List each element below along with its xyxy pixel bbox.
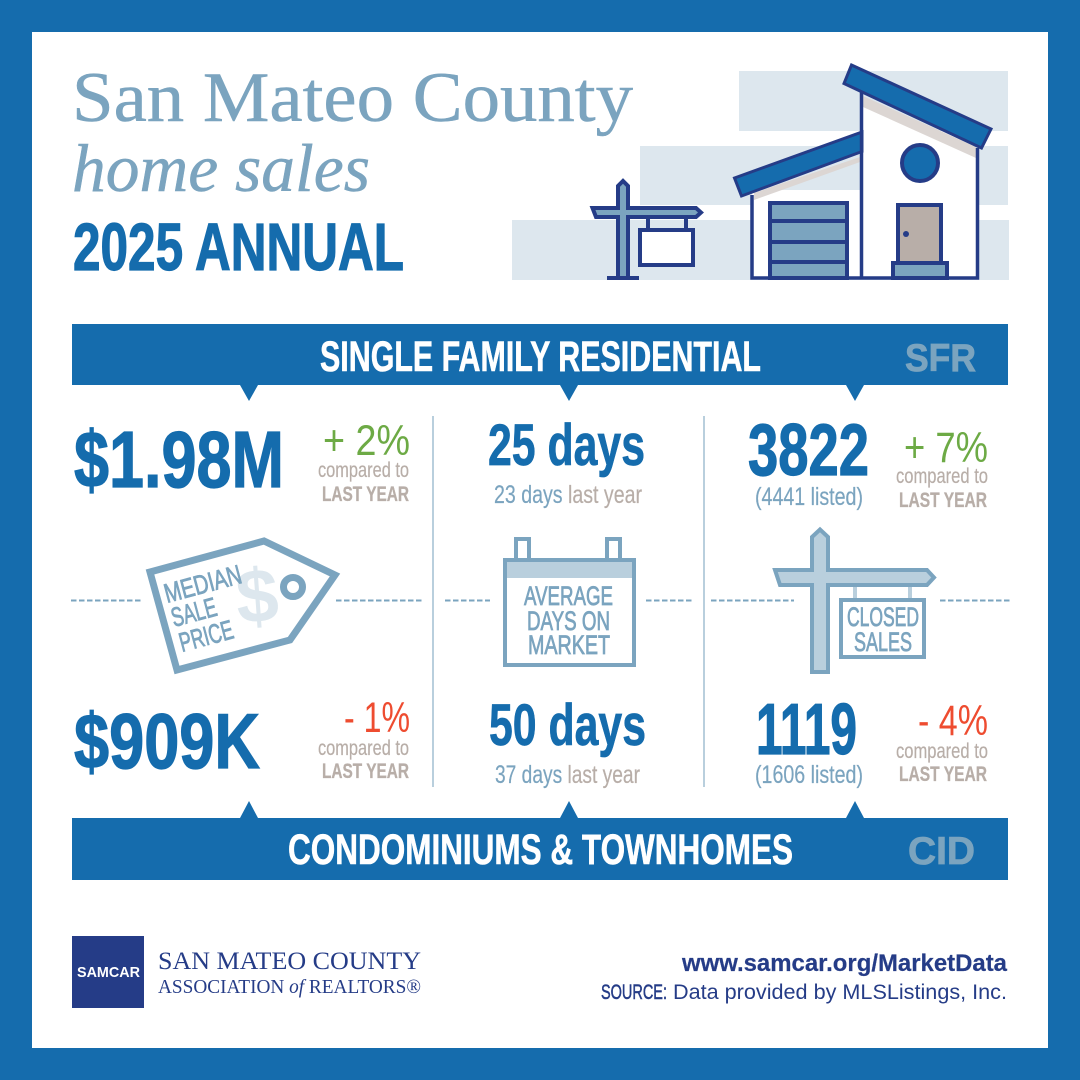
CID closed sales stat: compared to: [896, 740, 988, 763]
icon: calendar, average days on market: MARKET: [528, 630, 610, 660]
SFR days on market stat: [488, 413, 645, 509]
CID days on market stat: [489, 693, 646, 789]
SFR median sale price stat: + 2%: [323, 417, 410, 465]
icon: price tag, median sale price: MEDIAN: [161, 559, 245, 609]
logo: SAMCAR: SAN MATEO COUNTY: [158, 948, 421, 975]
icon: calendar, average days on market: AVERAGE: [524, 581, 613, 611]
icon: house: [734, 65, 991, 278]
title line: home sales: home sales: [72, 130, 370, 206]
CID closed sales stat: 1119: [756, 690, 857, 770]
background bars: [512, 71, 1009, 280]
CID days on market stat: 50 days: [489, 693, 646, 758]
banner: condominiums and townhomes: CID: [908, 830, 975, 873]
logo: SAMCAR: ASSOCIATION of REALTORS®: [158, 976, 421, 998]
SFR closed sales stat: [748, 410, 988, 512]
CID median sale price stat: LAST YEAR: [322, 760, 409, 783]
source and website: [601, 950, 1008, 1004]
SFR closed sales stat: 3822: [748, 410, 869, 491]
CID closed sales stat: - 4%: [918, 697, 988, 745]
illustration: house and for-sale sign: [512, 65, 1009, 280]
icon: price tag, median sale price: PRICE: [176, 615, 237, 658]
title line: San Mateo County: San Mateo County: [72, 59, 634, 137]
CID median sale price stat: $909K: [74, 697, 260, 785]
title line: 2025 ANNUAL: 2025 ANNUAL: [73, 210, 404, 285]
banner: single family residential: SINGLE FAMILY RESIDENTIAL: [320, 333, 761, 381]
banner: condominiums and townhomes: [72, 801, 1008, 880]
logo: SAMCAR: [72, 936, 421, 1008]
SFR closed sales stat: + 7%: [904, 424, 988, 472]
icon: price tag, median sale price: $: [233, 553, 281, 640]
banner: condominiums and townhomes: CONDOMINIUMS & TOWNHOMES: [288, 826, 793, 874]
icon: price tag, median sale price: [150, 541, 335, 670]
source and website: www.samcar.org/MarketData: [681, 950, 1008, 977]
banner: single family residential: [72, 324, 1008, 401]
CID median sale price stat: - 1%: [344, 694, 410, 742]
CID closed sales stat: [755, 690, 988, 789]
source and website: Data provided by MLSListings, Inc.: [673, 981, 1007, 1004]
icon: price tag, median sale price: SALE: [168, 592, 220, 633]
icon: closed sales sign: CLOSED: [847, 602, 919, 632]
SFR days on market stat: 25 days: [488, 413, 645, 478]
SFR median sale price stat: LAST YEAR: [322, 483, 409, 506]
SFR closed sales stat: compared to: [896, 465, 988, 488]
SFR closed sales stat: LAST YEAR: [899, 489, 987, 512]
icon: closed sales sign: SALES: [854, 627, 912, 657]
CID closed sales stat: (1606 listed): [755, 761, 863, 789]
title: [72, 59, 634, 285]
logo: SAMCAR: SAMCAR: [77, 964, 140, 981]
banner: single family residential: SFR: [905, 337, 976, 380]
column dividers and dashed guides: [71, 416, 1010, 787]
SFR closed sales stat: (4441 listed): [755, 483, 863, 511]
SFR days on market stat: 23 days last year: [494, 481, 642, 509]
icon: calendar, average days on market: [505, 539, 634, 665]
icon: closed sales sign: [775, 530, 934, 672]
source and website: SOURCE:: [601, 981, 667, 1004]
SFR median sale price stat: compared to: [318, 459, 409, 482]
CID median sale price stat: [74, 694, 410, 785]
icon: for-sale sign: [592, 181, 701, 278]
SFR median sale price stat: $1.98M: [74, 415, 284, 504]
CID days on market stat: 37 days last year: [495, 761, 640, 789]
CID closed sales stat: LAST YEAR: [899, 763, 987, 786]
icon: calendar, average days on market: DAYS ON: [527, 606, 610, 636]
CID median sale price stat: compared to: [318, 737, 409, 760]
